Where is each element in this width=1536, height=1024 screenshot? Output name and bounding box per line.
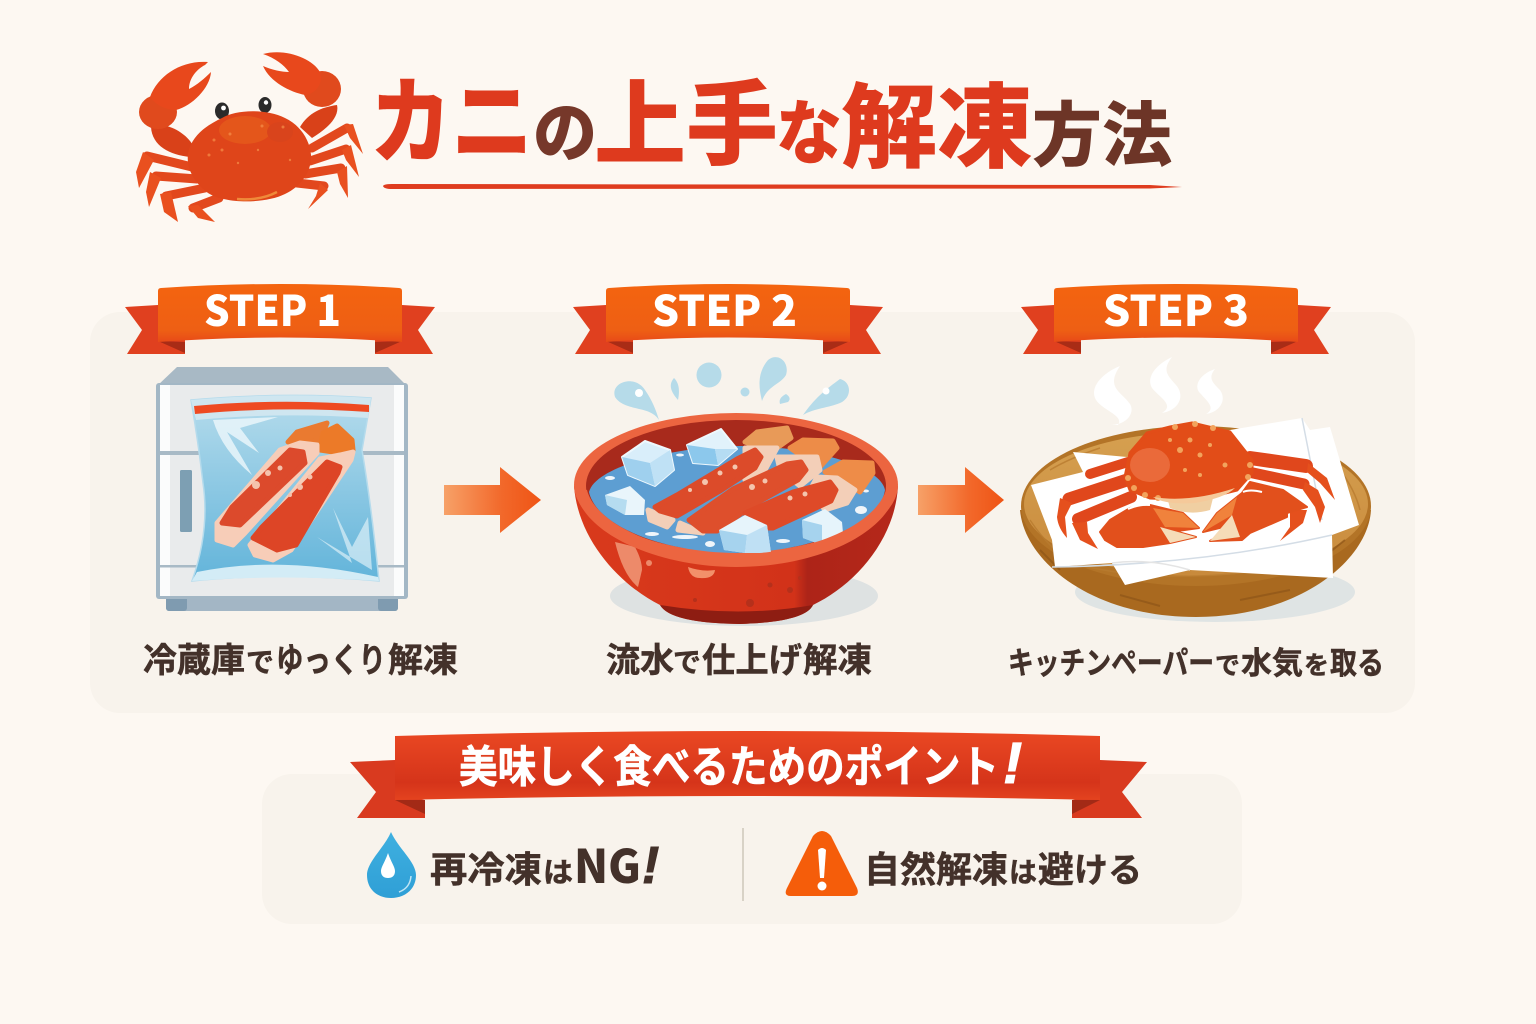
tip: no refreezing xyxy=(367,831,659,898)
title: カニ xyxy=(370,47,533,183)
ribbon: tips heading: ! xyxy=(1003,731,1022,796)
illustration: kitchen paper xyxy=(1031,418,1359,585)
caption: step 1: 解凍 xyxy=(388,642,458,680)
caption: step 1: ゆっくり xyxy=(276,642,386,680)
step 1 group xyxy=(125,278,458,680)
tip text: no refreezing xyxy=(430,831,659,897)
tip text: avoid natural thawing: は xyxy=(1009,857,1037,888)
panel: tips background xyxy=(262,774,1242,924)
illustration: bowl with ice water and crab legs xyxy=(574,413,898,626)
caption: step 3: キッチンペーパー xyxy=(1008,646,1214,681)
title: の xyxy=(533,80,597,176)
crab legs in bowl xyxy=(648,428,873,533)
caption: step 3 xyxy=(1008,646,1384,681)
caption: step 1: で xyxy=(246,647,274,678)
caption: step 2: 流水 xyxy=(606,642,674,680)
title xyxy=(370,47,1172,187)
plastic bag xyxy=(191,395,379,581)
caption: step 2: 解凍 xyxy=(803,642,872,680)
title underline xyxy=(383,184,1182,189)
tip text: no refreezing: 再冷凍 xyxy=(430,849,542,890)
illustration: refrigerator with bag of crab legs xyxy=(156,367,408,611)
icon: title crab xyxy=(136,52,363,222)
caption: step 2: 仕上げ xyxy=(702,642,802,680)
tip text: no refreezing: ! xyxy=(642,837,659,895)
caption: step 1 xyxy=(143,642,458,680)
divider xyxy=(742,828,744,901)
tip text: no refreezing: は xyxy=(543,857,573,888)
arrow: step 1 to step 2 xyxy=(444,467,541,533)
caption: step 3: 取る xyxy=(1330,646,1384,681)
illustration: wooden plate xyxy=(1020,426,1371,622)
crab legs xyxy=(217,423,353,560)
ribbon: tips heading: 美味しく食べるためのポイント xyxy=(459,743,999,792)
illustration: water splash xyxy=(614,357,849,420)
ribbon: STEP 3: STEP 3 xyxy=(1103,278,1249,339)
illustration: crab on plate xyxy=(1057,421,1335,549)
ribbon: STEP 2 xyxy=(573,278,883,354)
caption: step 2: で xyxy=(673,647,701,678)
step 2 group xyxy=(573,278,898,680)
tip text: avoid natural thawing xyxy=(864,849,1142,890)
step 3 group xyxy=(1008,278,1384,681)
caption: step 1: 冷蔵庫 xyxy=(143,642,245,680)
bowl rim front xyxy=(574,486,898,567)
title: 解凍 xyxy=(841,54,1033,187)
arrow: step 2 to step 3 xyxy=(918,467,1004,533)
title: 方法 xyxy=(1032,80,1172,181)
panel: steps background xyxy=(90,312,1415,713)
caption: step 2 xyxy=(606,642,872,680)
crab claws xyxy=(1100,482,1307,547)
ribbon: STEP 2: STEP 2 xyxy=(652,278,797,339)
caption: step 3: で xyxy=(1215,652,1240,680)
ribbon: STEP 1 xyxy=(125,278,435,354)
icon: warning triangle xyxy=(786,831,858,896)
title: 上手 xyxy=(594,51,778,184)
tip text: no refreezing: NG xyxy=(574,831,641,897)
ribbon: STEP 1: STEP 1 xyxy=(204,278,341,339)
title: な xyxy=(776,78,842,179)
tip text: avoid natural thawing: 避 xyxy=(1038,849,1074,890)
icon: water drop xyxy=(367,832,416,898)
tip text: avoid natural thawing: 自然解凍 xyxy=(864,849,1008,890)
illustration: steam xyxy=(1094,357,1223,425)
caption: step 3: 水気 xyxy=(1241,646,1303,681)
tip text: avoid natural thawing: ける xyxy=(1074,852,1142,890)
tip: avoid natural thawing xyxy=(786,831,1142,896)
caption: step 3: を xyxy=(1304,652,1329,680)
ribbon: tips heading xyxy=(350,731,1147,818)
ribbon: STEP 3 xyxy=(1021,278,1331,354)
ice cubes xyxy=(605,429,843,553)
